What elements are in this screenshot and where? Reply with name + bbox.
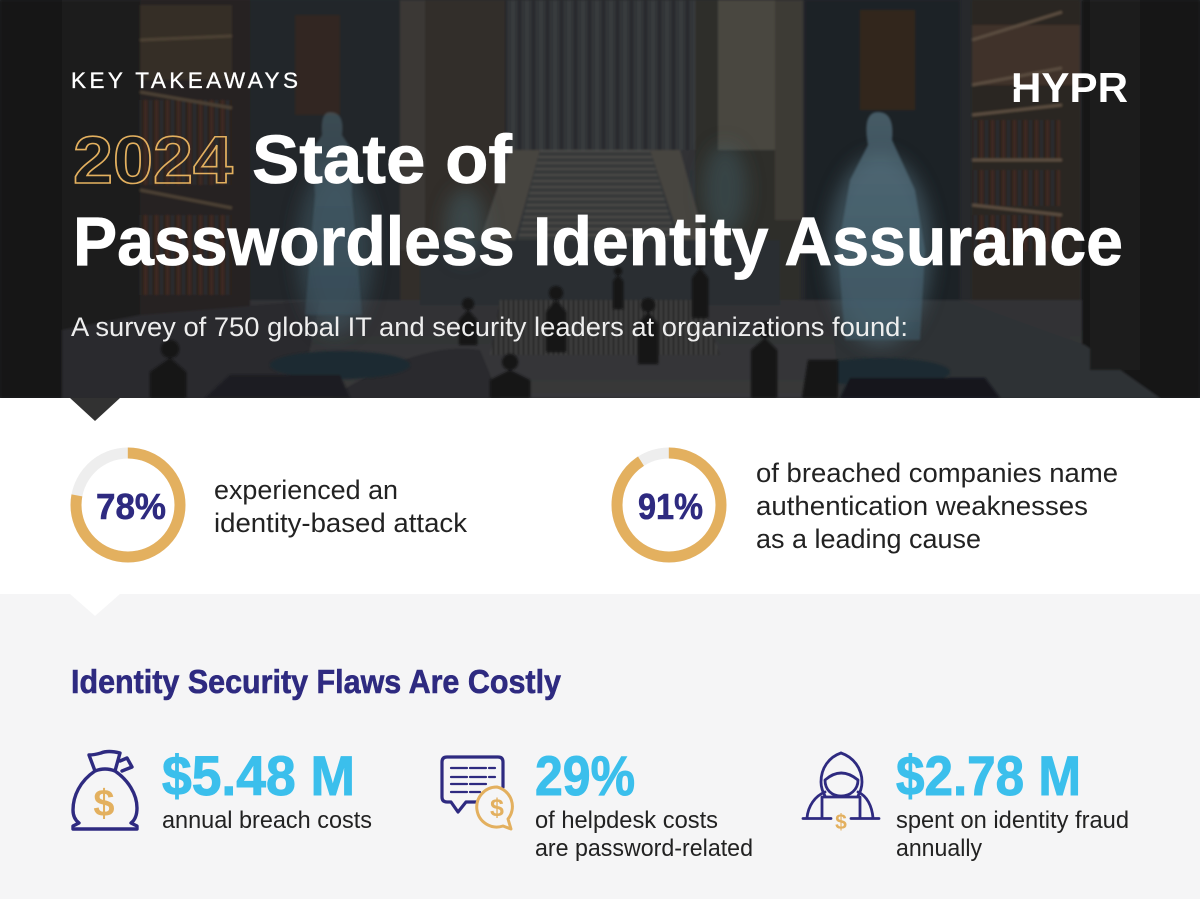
icon: hooded hacker bbox=[803, 753, 879, 834]
arrow: hero pointer bbox=[70, 398, 120, 421]
icon: hooded hacker: $ bbox=[835, 811, 847, 834]
title bbox=[73, 121, 1123, 280]
cost: helpdesk bbox=[442, 744, 753, 862]
description: as a leading cause bbox=[756, 524, 981, 554]
panel: costs section bbox=[0, 594, 1200, 899]
description: of helpdesk costs bbox=[535, 807, 718, 834]
subtitle: A survey of 750 global IT and security leaders at organizations found: bbox=[71, 312, 908, 342]
icon: money bag bbox=[73, 752, 137, 829]
heading: costs: Identity Security Flaws Are Costly bbox=[71, 663, 562, 700]
description: spent on identity fraud bbox=[896, 807, 1129, 834]
stat: 78 percent bbox=[76, 453, 468, 557]
description: are password-related bbox=[535, 835, 753, 862]
icon: money bag: $ bbox=[93, 783, 115, 825]
icon: chat with dollar coin: $ bbox=[490, 794, 504, 822]
description bbox=[214, 475, 468, 538]
description bbox=[896, 807, 1129, 862]
panel: key stats band bbox=[0, 398, 1200, 594]
title line 1: State of bbox=[252, 121, 513, 198]
description: annually bbox=[896, 835, 982, 862]
description bbox=[535, 807, 753, 862]
cost: breach bbox=[73, 744, 372, 834]
icon: chat with dollar coin bbox=[442, 757, 512, 829]
logo: HYPR: HYPR bbox=[1011, 64, 1128, 111]
description: identity-based attack bbox=[214, 508, 468, 538]
description: authentication weaknesses bbox=[756, 491, 1088, 521]
description: annual breach costs bbox=[162, 807, 372, 834]
value: $5.48 M bbox=[162, 744, 355, 807]
value: 29% bbox=[535, 744, 635, 807]
value: 91% bbox=[638, 486, 703, 527]
description bbox=[756, 458, 1118, 554]
panel: hero photo background bbox=[0, 0, 1200, 398]
description: experienced an bbox=[214, 475, 398, 505]
donut chart: 78% bbox=[76, 453, 180, 557]
value: 78% bbox=[96, 486, 166, 527]
description: of breached companies name bbox=[756, 458, 1118, 488]
eyebrow label: KEY TAKEAWAYS bbox=[71, 68, 298, 93]
cost: identity fraud bbox=[803, 744, 1129, 862]
holograms bbox=[297, 144, 932, 345]
title year outlined: 2024 bbox=[73, 123, 233, 198]
arrow: stats pointer bbox=[70, 594, 120, 616]
donut chart: 91% bbox=[617, 453, 721, 557]
value: $2.78 M bbox=[896, 744, 1081, 807]
stat: 91 percent bbox=[617, 453, 1118, 557]
title line 2: Passwordless Identity Assurance bbox=[73, 203, 1123, 280]
